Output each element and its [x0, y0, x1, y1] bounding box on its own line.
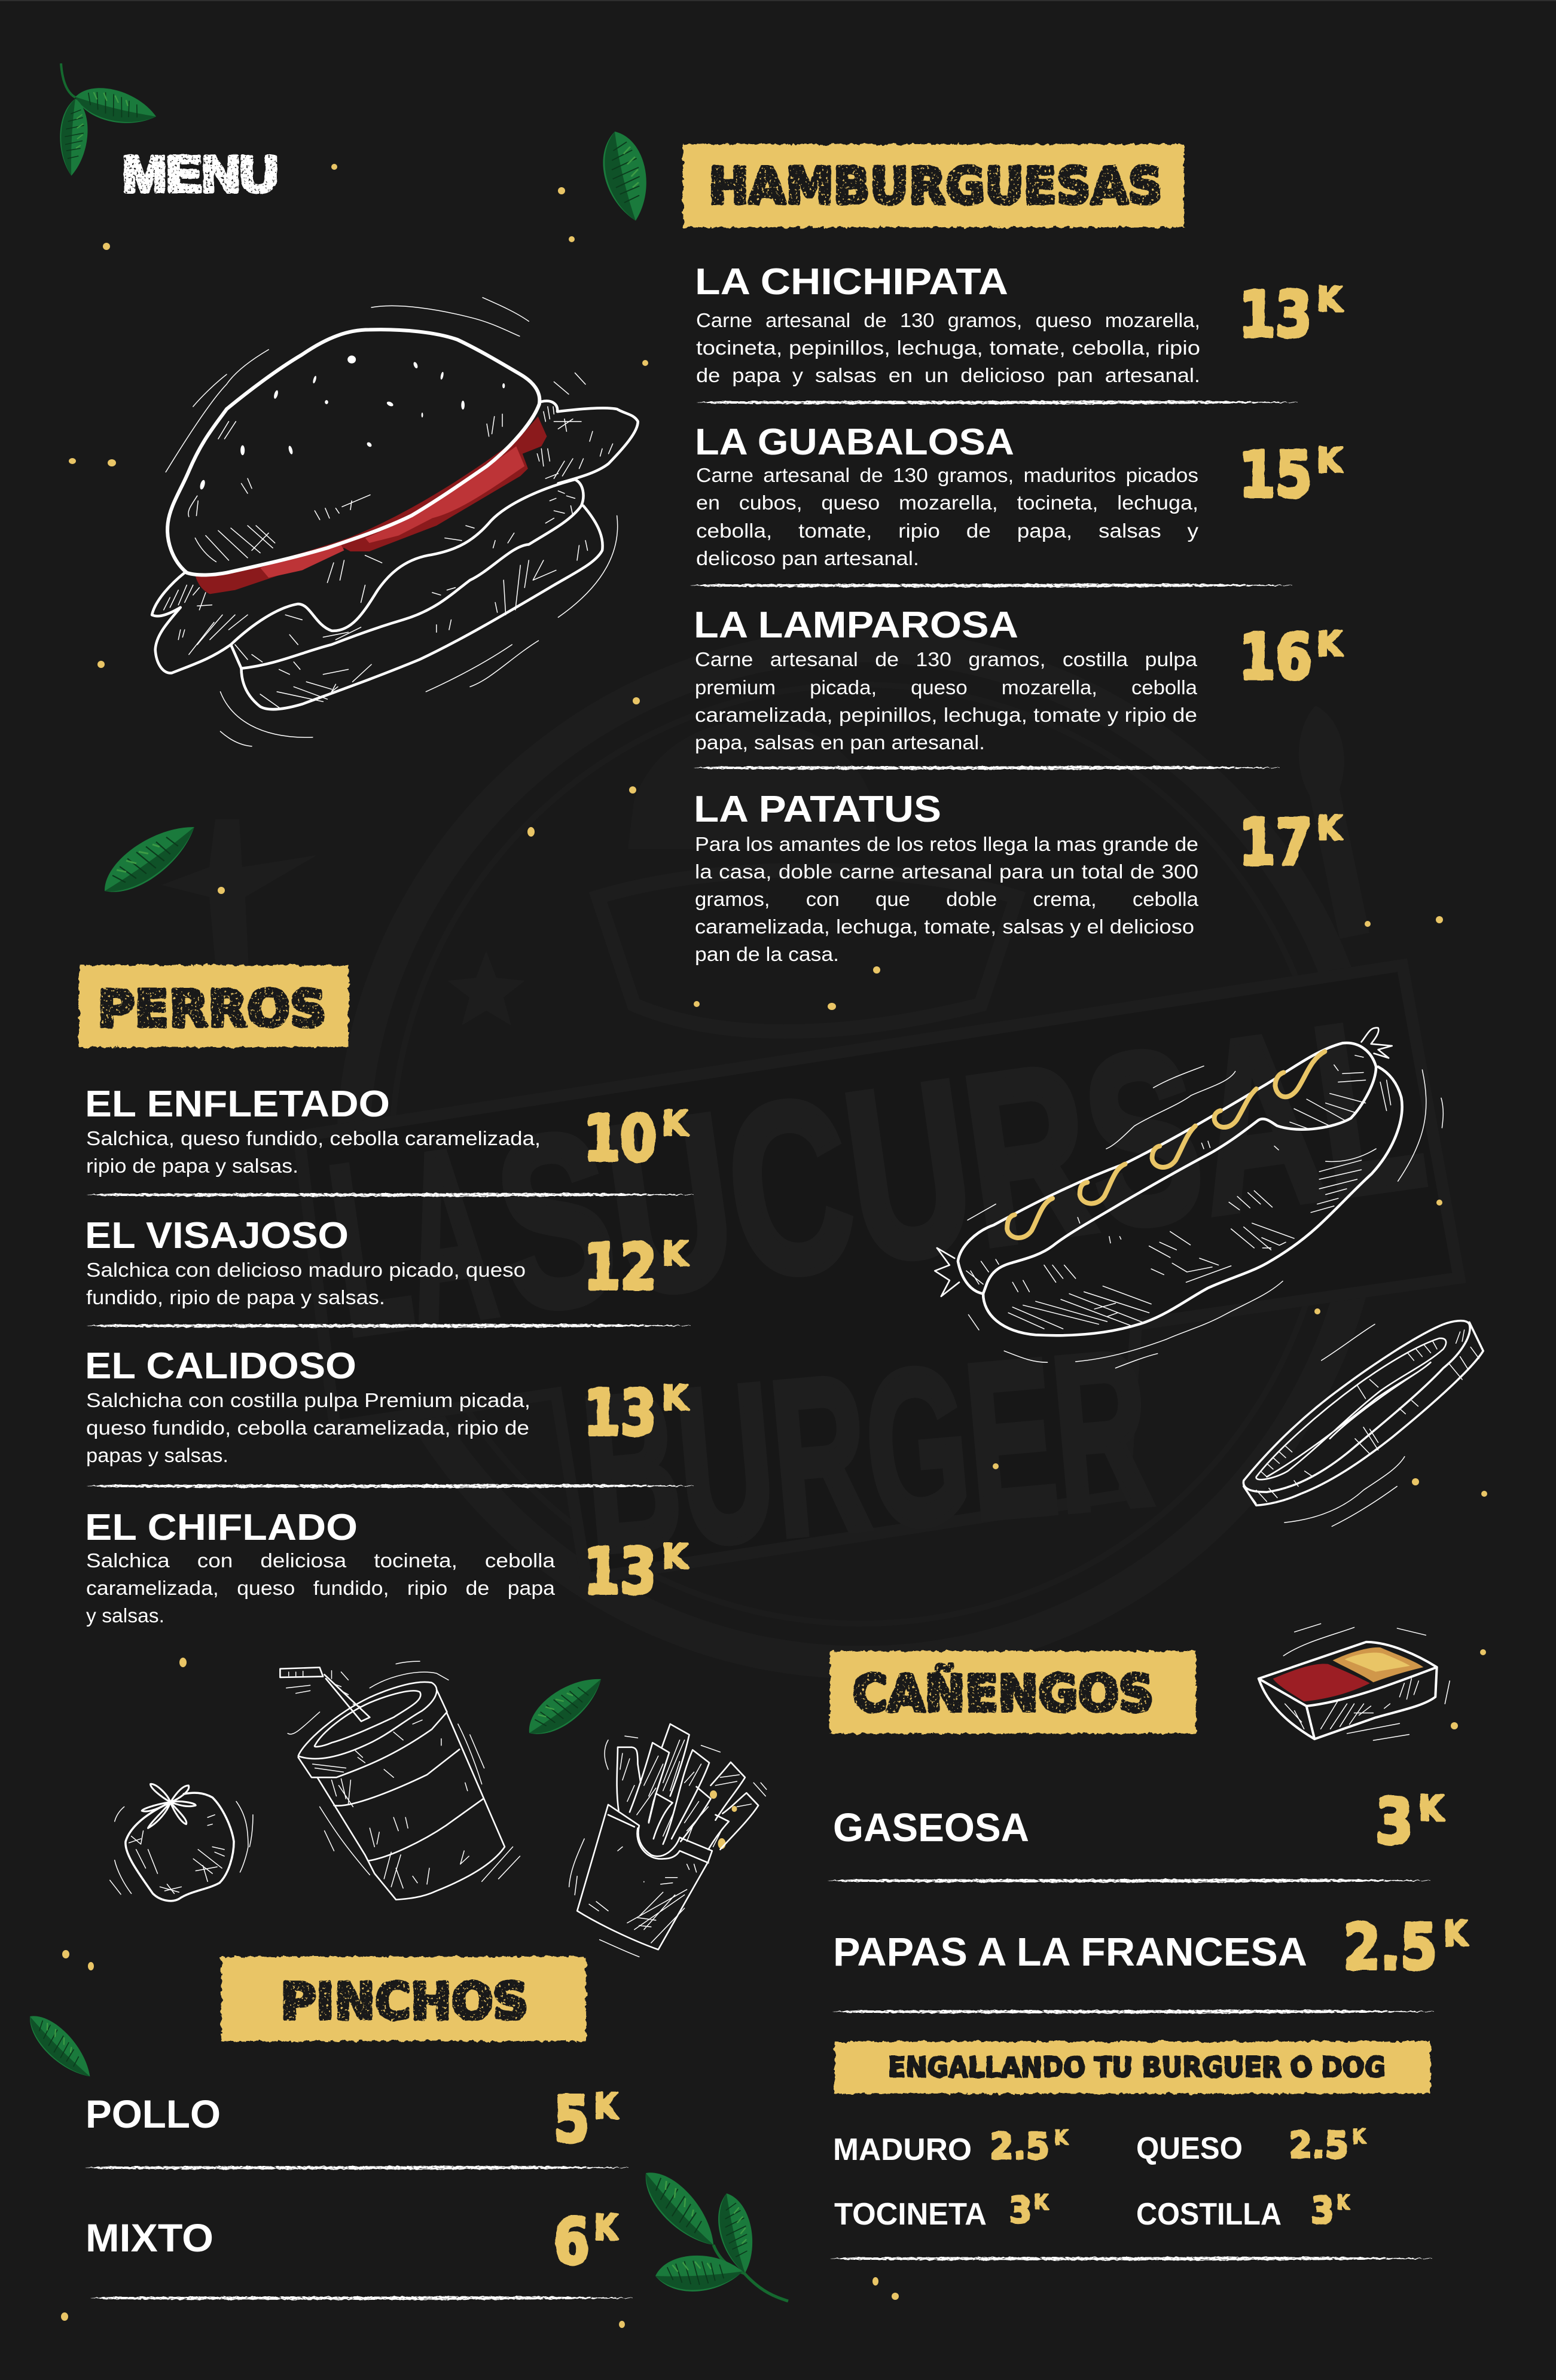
item: gaseosa: GASEOSA	[833, 1805, 1029, 1850]
item: la lamparosa: LA LAMPAROSA	[694, 605, 1018, 646]
extra: maduro	[833, 2125, 1069, 2168]
item: la patatus: gramos, con que doble crema, cebolla	[695, 888, 1199, 910]
item: el calidoso: queso fundido, cebolla caramelizada, ripio de	[86, 1417, 529, 1439]
item: la chichipata	[695, 261, 1344, 386]
item: pollo	[86, 2083, 619, 2156]
item: la guabalosa	[695, 422, 1344, 569]
watermark logo: La Sucursal Burger	[161, 646, 1459, 1662]
extra: maduro: K	[1054, 2126, 1069, 2149]
item: la guabalosa: en cubos, queso mozarella, tocineta, lechuga,	[696, 492, 1198, 514]
item: el chiflado: 13	[584, 1535, 657, 1608]
watermark logo: La Sucursal Burger: LA	[316, 1096, 508, 1387]
item: la lamparosa: caramelizada, pepinillos, lechuga, tomate y ripio de	[695, 704, 1197, 726]
item: la chichipata: K	[1317, 280, 1344, 319]
illustration: drink cup	[280, 1661, 520, 1900]
item: la guabalosa: 15	[1239, 438, 1312, 511]
heading badge: hamburguesas: HAMBURGUESAS	[709, 157, 1163, 215]
item: papas a la francesa: 2.5	[1344, 1911, 1437, 1984]
item: papas a la francesa: PAPAS A LA FRANCESA	[833, 1930, 1307, 1975]
item: la guabalosa: K	[1317, 441, 1344, 480]
item: gaseosa: 3	[1375, 1785, 1413, 1858]
extra: tocineta: 3	[1009, 2189, 1032, 2232]
item: la chichipata: LA CHICHIPATA	[695, 261, 1008, 303]
item: la patatus: 17	[1239, 806, 1312, 879]
extra: tocineta: TOCINETA	[834, 2197, 987, 2232]
heading badge: pinchos: PINCHOS	[280, 1972, 528, 2031]
item: mixto: 6	[554, 2205, 590, 2278]
item: el visajoso: fundido, ripio de papa y salsas.	[86, 1286, 385, 1308]
extra: queso: 2.5	[1289, 2124, 1348, 2167]
sub-heading badge: engallando tu burguer o dog	[835, 2042, 1430, 2094]
extra: costilla	[1136, 2189, 1350, 2232]
heading badge: pinchos	[221, 1957, 586, 2041]
item: la lamparosa: papa, salsas en pan artesanal.	[695, 731, 985, 753]
item: la chichipata: Carne artesanal de 130 gramos, queso mozarella,	[696, 309, 1200, 331]
item: la patatus: Para los amantes de los retos llega la mas grande de	[695, 833, 1198, 855]
leaf: between drink and fries	[519, 1666, 611, 1746]
extra: queso: K	[1352, 2125, 1366, 2148]
item: el calidoso	[85, 1345, 689, 1466]
item: gaseosa	[833, 1785, 1445, 1858]
item: el enfletado: Salchica, queso fundido, cebolla caramelizada,	[86, 1127, 541, 1149]
extra: queso	[1136, 2124, 1366, 2167]
item: la guabalosa: delicoso pan artesanal.	[696, 547, 919, 569]
item: el chiflado: K	[662, 1537, 689, 1576]
item: el visajoso: K	[662, 1235, 689, 1274]
item: el chiflado: caramelizada, queso fundido, ripio de papa	[86, 1577, 556, 1599]
extra: maduro: 2.5	[990, 2125, 1049, 2168]
item: la guabalosa: cebolla, tomate, ripio de papa, salsas y	[696, 520, 1199, 542]
extras list	[833, 2124, 1366, 2232]
item: la lamparosa	[694, 605, 1344, 753]
heading badge: cañengos	[830, 1651, 1196, 1734]
item: la patatus: K	[1317, 809, 1344, 848]
leaf: left middle	[94, 812, 205, 905]
heading badge: perros: PERROS	[97, 980, 327, 1038]
item: el chiflado: EL CHIFLADO	[85, 1507, 358, 1548]
extra: costilla: K	[1337, 2190, 1350, 2214]
item: el visajoso: EL VISAJOSO	[85, 1215, 349, 1256]
illustration: onion ring	[1243, 1321, 1483, 1526]
extra: queso: QUESO	[1136, 2131, 1243, 2166]
item: la chichipata: 13	[1239, 278, 1312, 351]
item: el calidoso: 13	[584, 1377, 657, 1450]
item: el chiflado: y salsas.	[86, 1604, 164, 1627]
item: pollo: POLLO	[86, 2092, 221, 2136]
extra: costilla: 3	[1311, 2189, 1334, 2232]
heading badge: perros	[79, 965, 349, 1047]
watermark logo: La Sucursal Burger: BURGER	[575, 1304, 1159, 1600]
item: papas a la francesa: K	[1444, 1913, 1469, 1954]
heading badge: hamburguesas	[683, 144, 1184, 227]
item: el visajoso	[85, 1215, 689, 1308]
item: el visajoso: 12	[584, 1231, 657, 1304]
extra: tocineta	[834, 2189, 1049, 2232]
extra: tocineta: K	[1034, 2190, 1049, 2214]
leaf cluster: bottom	[634, 2161, 788, 2301]
illustration: hot dog	[935, 1028, 1443, 1368]
item: la guabalosa: LA GUABALOSA	[695, 422, 1014, 463]
item: el chiflado: Salchica con deliciosa tocineta, cebolla	[86, 1549, 556, 1572]
item: el calidoso: K	[662, 1379, 689, 1418]
item: mixto: MIXTO	[86, 2216, 213, 2260]
item: el enfletado: ripio de papa y salsas.	[86, 1155, 298, 1177]
leaf cluster: top left	[58, 63, 160, 176]
leaf: top centre	[595, 127, 656, 225]
item: el enfletado: EL ENFLETADO	[85, 1084, 390, 1125]
item: el calidoso: Salchicha con costilla pulpa Premium picada,	[86, 1389, 530, 1411]
item: el enfletado	[85, 1084, 689, 1177]
item: papas a la francesa	[833, 1911, 1469, 1984]
item: la lamparosa: 16	[1239, 621, 1312, 694]
item: mixto: K	[594, 2207, 619, 2248]
item: gaseosa: K	[1418, 1788, 1445, 1829]
illustration: french fries	[569, 1724, 767, 1957]
item: el enfletado: K	[662, 1104, 689, 1143]
item: la patatus: pan de la casa.	[695, 943, 839, 965]
item: la lamparosa: K	[1317, 625, 1344, 664]
item: la patatus: LA PATATUS	[694, 789, 941, 830]
item: la chichipata: tocineta, pepinillos, lechuga, tomate, cebolla, ripio	[696, 337, 1200, 359]
item: el calidoso: papas y salsas.	[86, 1444, 228, 1466]
item: el visajoso: Salchica con delicioso maduro picado, queso	[86, 1259, 526, 1281]
item: el chiflado	[85, 1507, 689, 1627]
extra: maduro: MADURO	[833, 2132, 972, 2167]
item: la patatus: la casa, doble carne artesanal para un total de 300	[695, 861, 1198, 883]
extra: costilla: COSTILLA	[1136, 2197, 1282, 2232]
item: la lamparosa: Carne artesanal de 130 gramos, costilla pulpa	[695, 648, 1198, 670]
heading badge: cañengos: CAÑENGOS	[852, 1664, 1154, 1723]
item: la lamparosa: premium picada, queso mozarella, cebolla	[695, 676, 1198, 698]
illustration: sauce tray	[1259, 1624, 1450, 1740]
item: la patatus	[694, 789, 1344, 965]
item: la chichipata: de papa y salsas en un delicioso pan artesanal.	[696, 364, 1200, 386]
item: pollo: K	[594, 2086, 619, 2126]
item: el enfletado: 10	[584, 1102, 657, 1175]
item: mixto	[86, 2205, 619, 2278]
sub-heading badge: engallando tu burguer o dog: ENGALLANDO TU BURGUER O DOG	[888, 2051, 1386, 2083]
title: menu: MENU	[123, 146, 278, 202]
leaf: left bottom	[20, 2006, 100, 2086]
item: la guabalosa: Carne artesanal de 130 gramos, maduritos picados	[696, 464, 1198, 486]
item: pollo: 5	[554, 2083, 590, 2156]
illustration: burger	[152, 298, 638, 746]
item: la patatus: caramelizada, lechuga, tomate, salsas y el delicioso	[695, 916, 1194, 938]
illustration: tomato	[110, 1784, 253, 1901]
item: el calidoso: EL CALIDOSO	[85, 1345, 356, 1387]
